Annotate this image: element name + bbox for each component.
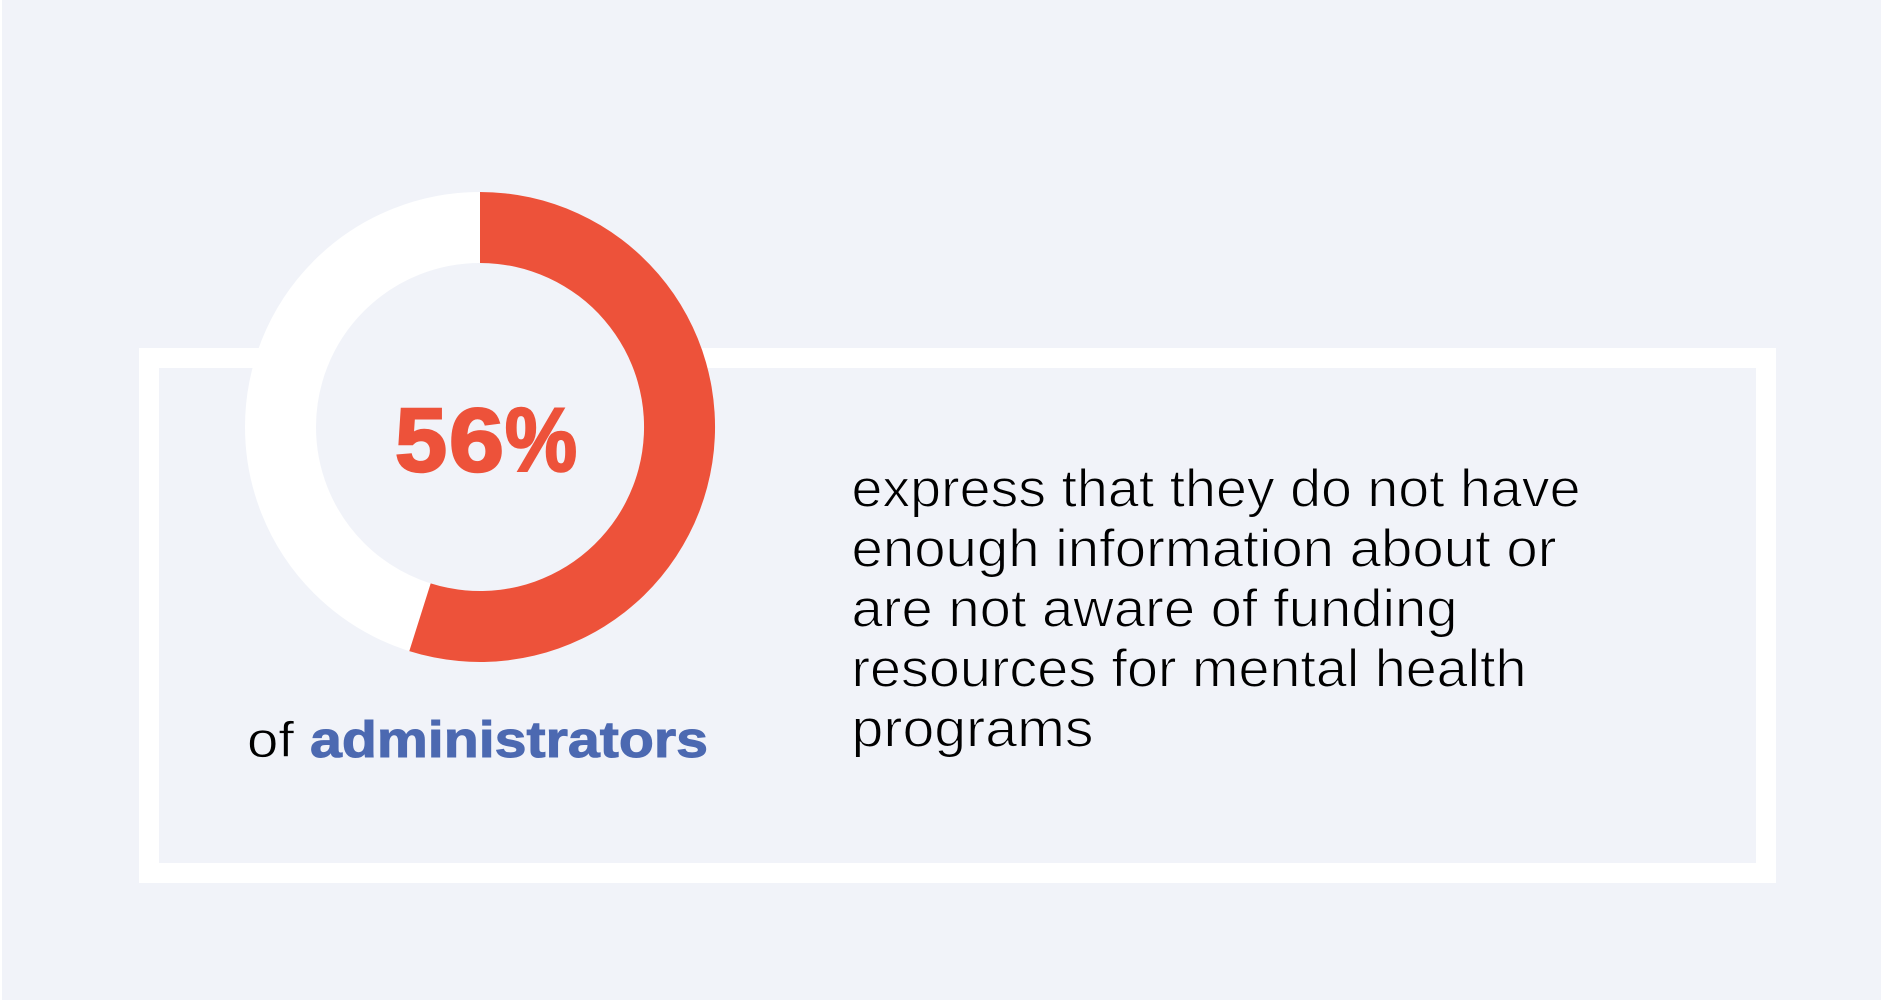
description text block: programs <box>852 700 1094 758</box>
donut track: remainder <box>280 228 680 626</box>
donut chart: 56 percent <box>280 192 715 662</box>
big number: 56% <box>395 391 577 491</box>
big number: 56%: 6 <box>449 391 504 491</box>
big number: 56%: 5 <box>395 391 447 491</box>
caption: of administrators: administrators <box>310 711 708 768</box>
description text block: enough information about or <box>852 520 1556 578</box>
description text block: resources for mental health <box>852 640 1526 698</box>
description text block: are not aware of funding <box>852 580 1458 638</box>
description text block: express that they do not have <box>852 460 1580 518</box>
donut segment: 56 percent <box>409 192 715 662</box>
description text block <box>852 460 1580 758</box>
big number: 56%: % <box>505 391 577 491</box>
caption: of administrators: of <box>247 712 294 768</box>
panel: white outlined frame <box>149 358 1766 873</box>
